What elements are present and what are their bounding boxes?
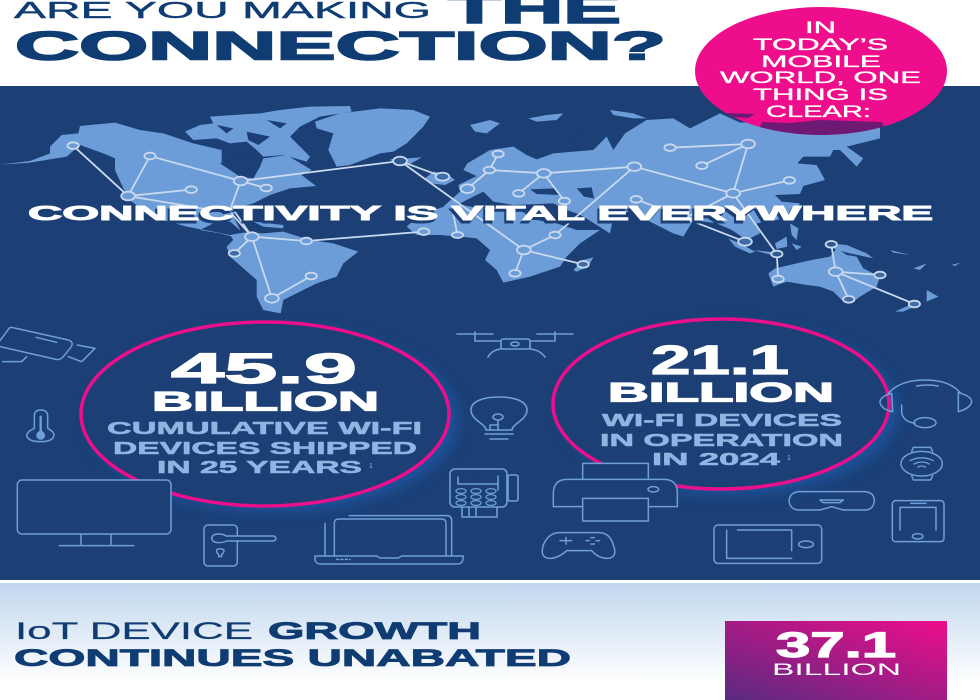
stat circle: 21.1 billion: IN OPERATION	[600, 430, 843, 450]
stat box: 37.1 billion: BILLION	[772, 660, 901, 679]
icon: smart watch	[901, 447, 942, 480]
icon: door handle	[204, 525, 276, 566]
device icons	[0, 327, 972, 566]
icon: light bulb	[471, 397, 527, 439]
callout text: CLEAR:	[766, 102, 871, 121]
icon: laptop	[315, 516, 463, 564]
map overlap on callout	[726, 113, 884, 135]
callout text	[720, 18, 921, 121]
section heading: GROWTH	[268, 618, 481, 645]
americas	[0, 106, 380, 313]
title	[14, 0, 666, 68]
network lines	[73, 144, 914, 304]
section background	[0, 583, 980, 683]
icon: thermometer	[27, 410, 54, 442]
stat circle: 21.1 billion: WI-FI DEVICES	[602, 410, 842, 430]
icon: vr headset	[789, 492, 874, 510]
icon: smartphone	[892, 501, 944, 542]
icon: security camera	[0, 327, 95, 362]
pink callout circle	[695, 7, 947, 140]
network	[68, 140, 920, 307]
headline: connectivity is vital everywhere	[26, 203, 933, 228]
stat circle: 21.1 billion: IN 2024	[652, 449, 781, 469]
stat circle: 45.9 billion: BILLION	[152, 386, 379, 416]
stat circle: 45.9 billion: CUMULATIVE WI-FI	[107, 418, 422, 438]
icon: headset	[880, 380, 972, 428]
panel: iot growth	[0, 583, 980, 700]
panel background	[0, 86, 980, 580]
icon: drone	[457, 332, 573, 357]
stat box: 37.1 billion	[725, 621, 947, 700]
stat box: 37.1 billion: 37.1	[776, 626, 896, 665]
callout text: MOBILE	[761, 52, 881, 71]
icon: payment terminal	[450, 469, 518, 517]
callout text: IN	[805, 18, 836, 37]
stat circle: 45.9 billion: IN 25 YEARS	[157, 457, 362, 477]
title: CONNECTION?	[15, 24, 666, 68]
icon: tablet	[714, 525, 822, 563]
world map	[0, 106, 960, 313]
indonesia, australia and new zealand	[728, 223, 960, 312]
section heading: IoT DEVICE	[15, 618, 253, 645]
stat circle: 45.9 billion: 1	[369, 463, 373, 470]
network nodes	[68, 140, 920, 307]
stat circle: 45.9 billion: 45.9	[171, 345, 357, 393]
callout text: THING IS	[753, 85, 888, 104]
section heading	[14, 618, 571, 672]
stat circle: 21.1 billion: BILLION	[608, 378, 834, 408]
stat circle: 45.9 billion: DEVICES SHIPPED	[113, 438, 417, 458]
stat circle: 21.1 billion: 21.1	[651, 337, 789, 383]
icon: monitor	[17, 480, 171, 546]
panel: connectivity	[0, 86, 980, 580]
icon: game controller	[542, 533, 615, 558]
stat circle: 21.1 billion: 1	[787, 455, 791, 462]
callout text: WORLD, ONE	[720, 68, 921, 87]
headline: connectivity is vital everywhere: CONNECTIVITY IS VITAL EVERYWHERE	[26, 206, 931, 228]
callout text: TODAY’S	[753, 35, 888, 54]
section heading: CONTINUES UNABATED	[14, 645, 571, 672]
stat circle: 45.9 billion	[81, 322, 456, 510]
stat circle: 21.1 billion	[553, 319, 896, 493]
headline: connectivity is vital everywhere: CONNECTIVITY IS VITAL EVERYWHERE	[28, 203, 933, 225]
europe, africa and asia	[380, 108, 880, 283]
icon: printer	[553, 463, 677, 521]
